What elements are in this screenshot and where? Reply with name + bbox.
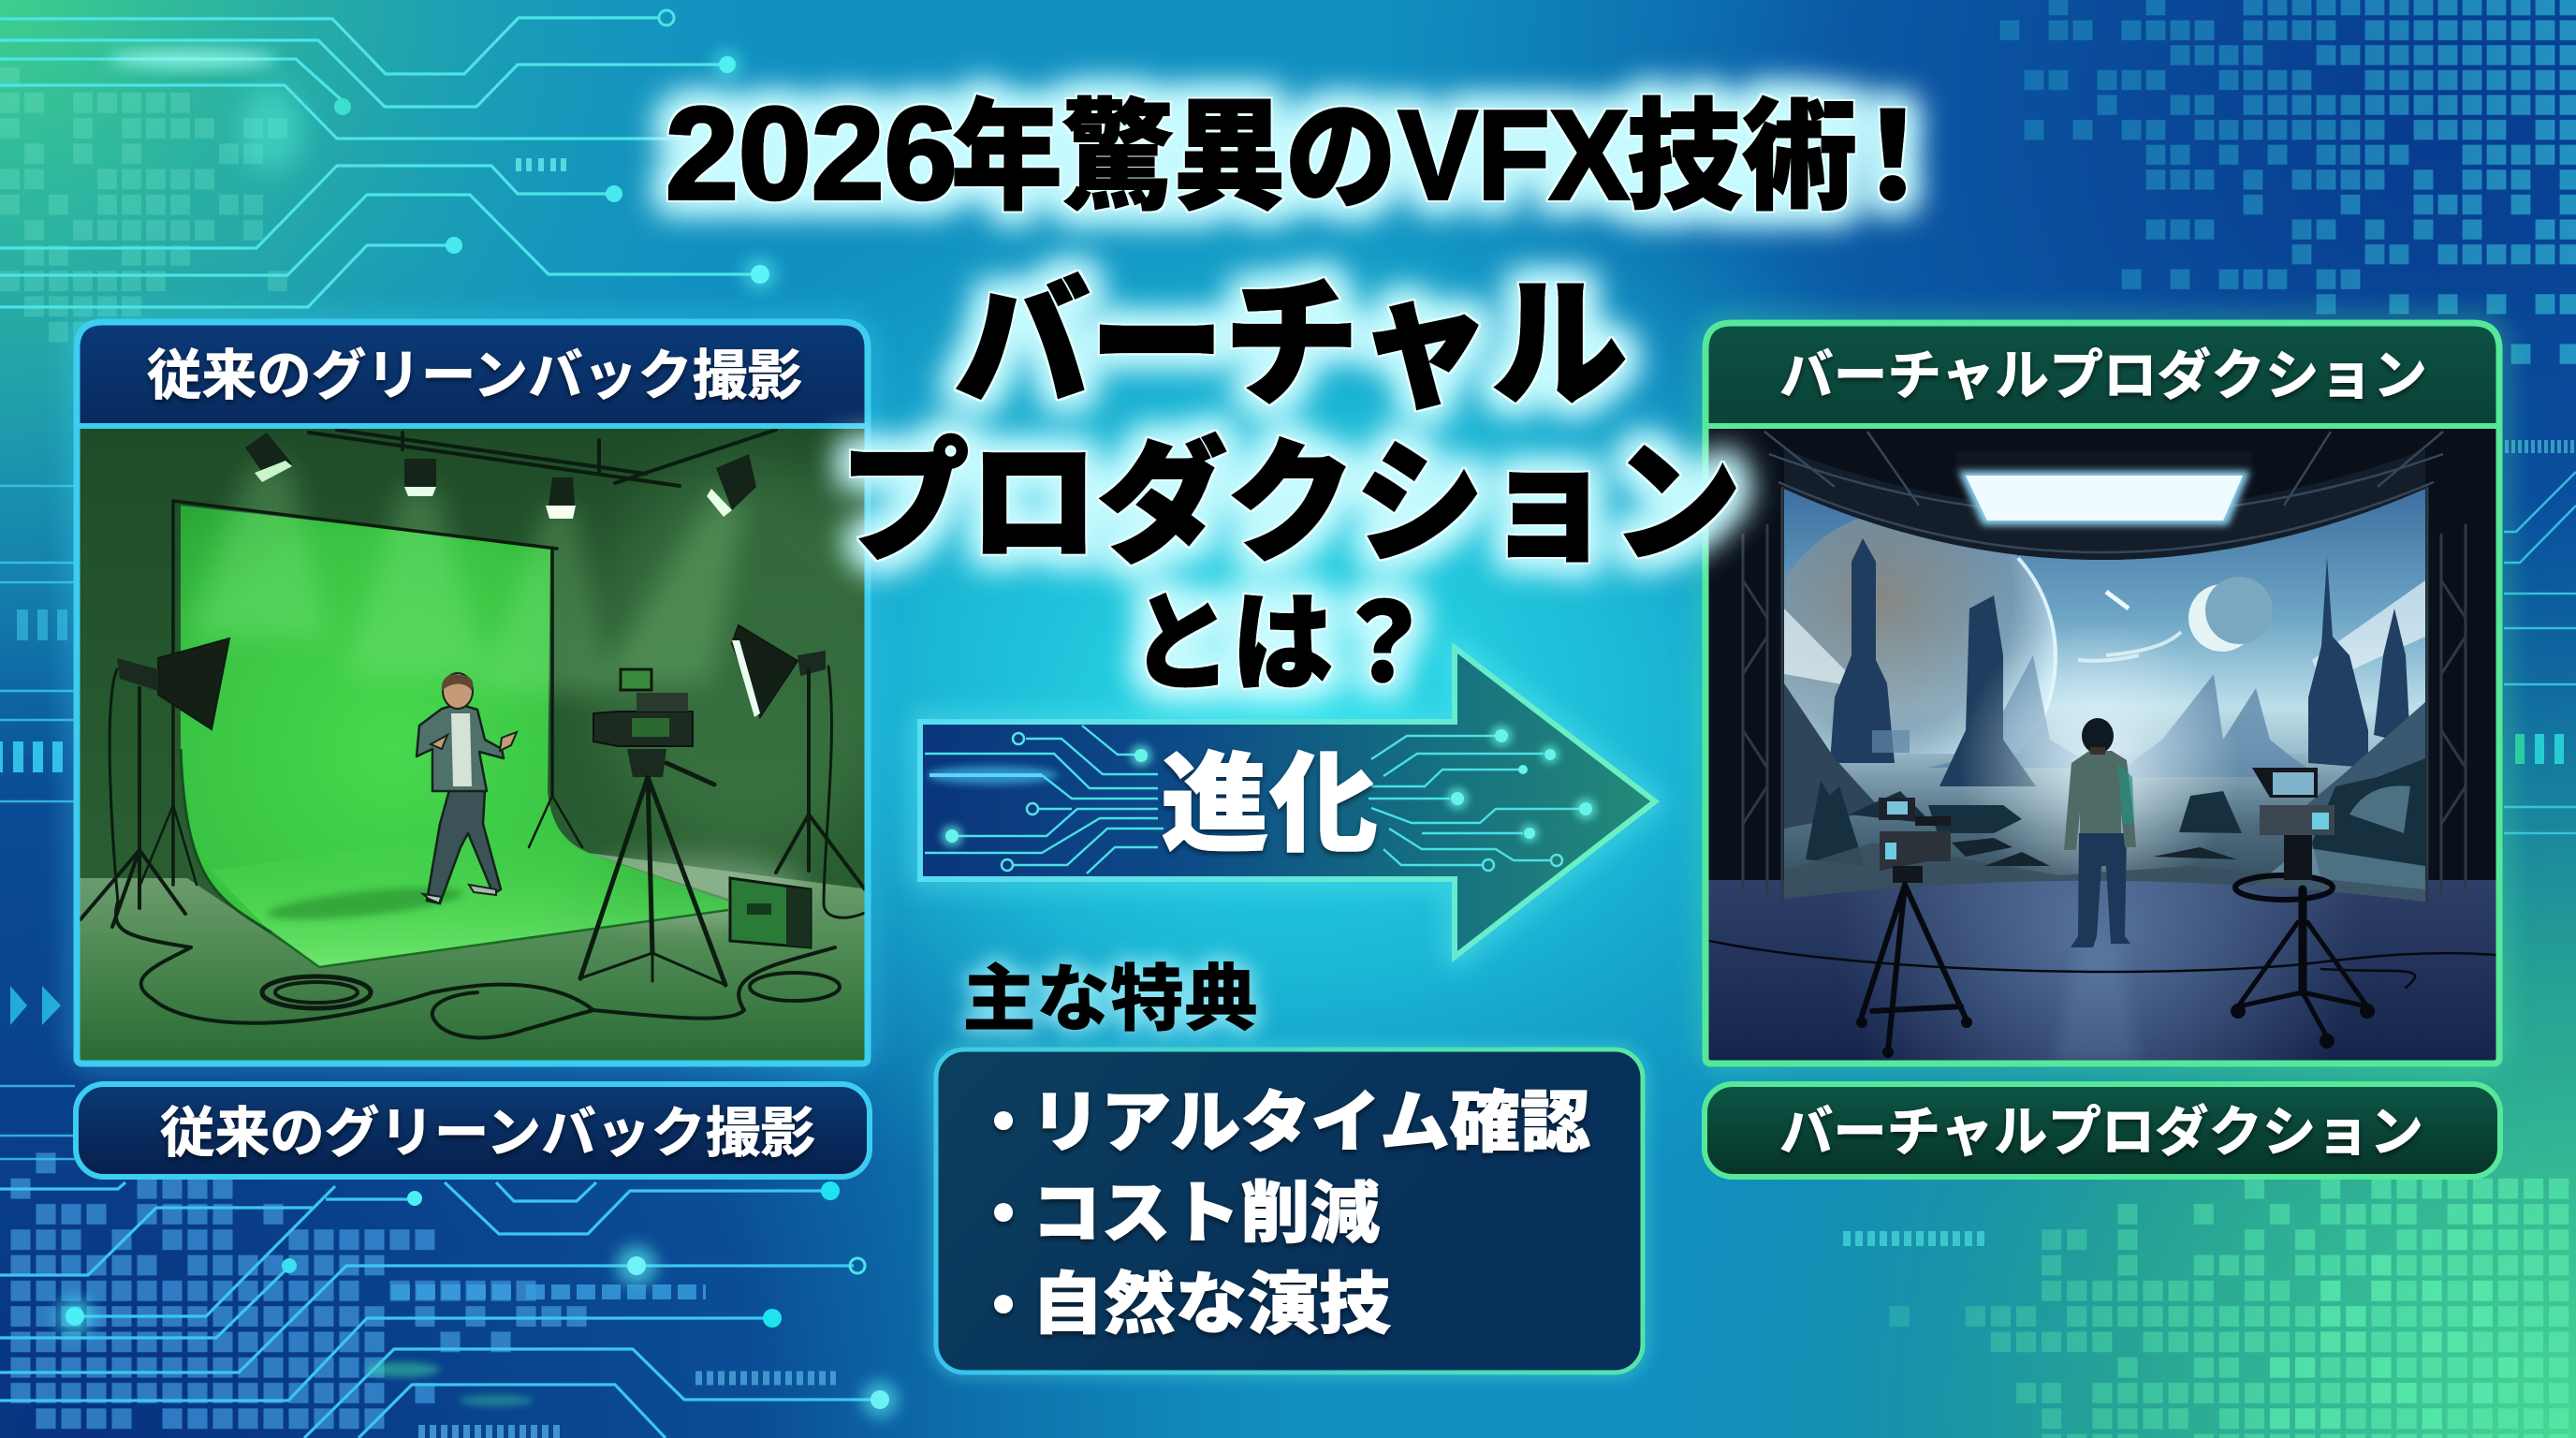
brighter cells bottom right — [2267, 1214, 2521, 1419]
right panel: virtual production — [1705, 323, 2500, 1177]
heading line 2: プロダクション — [841, 395, 1741, 588]
pixel grid: top left — [0, 78, 290, 332]
arrow circuit lines — [925, 725, 1597, 873]
heading line 3: とは？ — [1131, 557, 1434, 712]
bullet list — [994, 1086, 1590, 1343]
header label: バーチャルプロダクション — [1779, 345, 2427, 406]
right edge decoration — [2504, 447, 2576, 833]
power box — [730, 878, 811, 947]
small bar glyphs bottom right — [1843, 1231, 1988, 1246]
right panel frame and header — [1705, 323, 2499, 1064]
right caption pill — [1705, 1084, 2500, 1177]
arrow label: 進化 — [1161, 716, 1378, 873]
pixel grid: bottom left — [7, 1164, 590, 1419]
pixel grid: bottom right — [1887, 1189, 2571, 1438]
person shadow — [266, 885, 464, 923]
right softbox light — [732, 625, 798, 717]
caption text: バーチャルプロダクション — [1779, 1102, 2423, 1163]
cables on floor — [116, 902, 840, 1037]
item 3: 自然な演技 — [1032, 1268, 1391, 1343]
backdrop frame — [173, 501, 557, 885]
title: 2026 — [666, 80, 957, 227]
circuit traces: top left — [0, 10, 777, 307]
spot lights — [245, 433, 756, 519]
panel glow left — [77, 322, 868, 1064]
evolution arrow — [920, 648, 1655, 957]
left softbox light — [158, 638, 229, 729]
right camera on pedestal — [2231, 768, 2375, 1049]
foreground rocks — [1806, 758, 2425, 889]
green backdrop — [181, 506, 728, 967]
panel glow right — [1705, 323, 2499, 1064]
side truss towers — [1743, 487, 2466, 903]
pixel grid: top right — [1998, 6, 2576, 354]
light beams — [187, 463, 744, 693]
item 1: リアルタイム確認 — [1031, 1086, 1590, 1161]
heading line 1: バーチャル — [955, 231, 1627, 434]
left edge decoration — [0, 486, 75, 1159]
ceiling light panel — [1958, 471, 2250, 525]
title: 年驚異の — [951, 60, 1397, 233]
title: ！ — [1833, 60, 1953, 233]
studio floor — [1705, 880, 2500, 1067]
camera on tripod — [580, 669, 725, 985]
benefits box — [936, 1049, 1643, 1372]
benefits heading: 主な特典 — [962, 941, 1258, 1046]
item 2: コスト削減 — [1032, 1177, 1380, 1252]
circuit traces: bottom left — [0, 1181, 899, 1438]
header label: 従来のグリーンバック撮影 — [147, 345, 802, 406]
left panel frame and header — [77, 322, 868, 1064]
left camera — [1856, 798, 1972, 1058]
far spires — [1928, 655, 2321, 777]
truss bars — [309, 430, 776, 486]
alien towers — [1830, 538, 2036, 786]
ceiling truss ring — [1764, 432, 2443, 560]
floor cables — [1709, 941, 2496, 988]
performer — [2064, 718, 2136, 947]
title: 技術 — [1627, 60, 1857, 233]
LED volume illustration — [1705, 426, 2500, 1067]
green screen studio illustration — [77, 426, 908, 1064]
presenter — [417, 673, 517, 903]
left caption pill — [76, 1084, 870, 1177]
title and main heading — [666, 60, 1953, 712]
caption text: 従来のグリーンバック撮影 — [160, 1103, 815, 1164]
title: VFX — [1398, 84, 1629, 226]
left panel: green screen shoot — [76, 322, 908, 1177]
LED wall scene — [1764, 468, 2430, 913]
studio floor — [77, 853, 869, 1064]
